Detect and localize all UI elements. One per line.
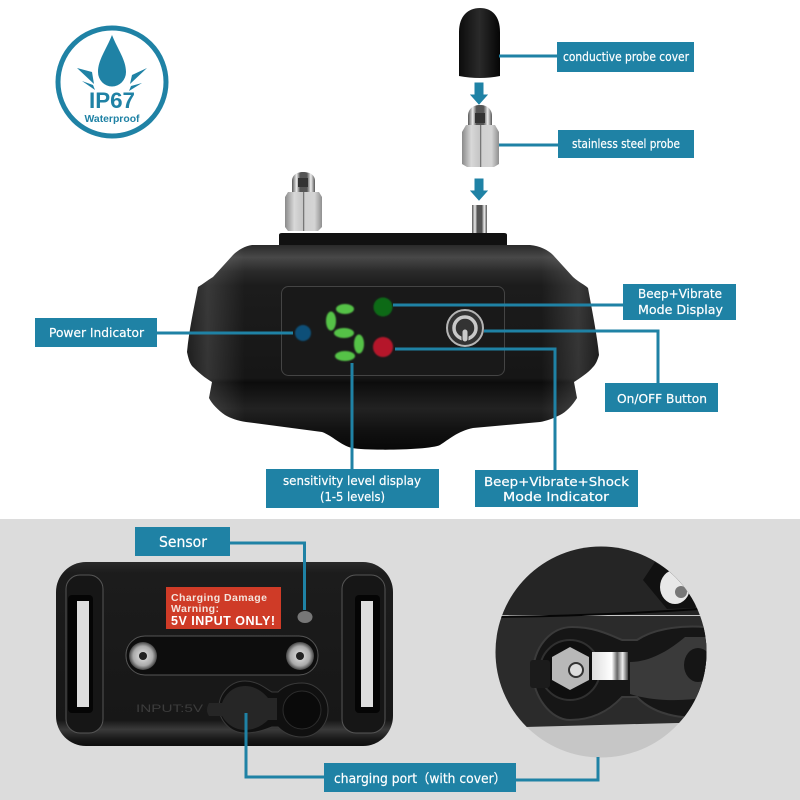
nut centre [569,663,583,677]
label: sensitivity level display: (1-5 levels) [320,490,385,504]
label: sensor [135,527,230,556]
leader line: shock indicator [395,349,555,470]
sensor window [298,611,312,623]
icon: IP67 waterproof badge: Waterproof [84,113,140,125]
power button [447,310,483,346]
leader line: sensor [230,543,304,610]
LED: sensitivity digit 5 [326,304,364,361]
leader line: probe [499,144,558,146]
warning sticker: 5V INPUT ONLY! [171,614,275,628]
housing [187,245,599,450]
label: sensor: Sensor [159,533,208,551]
leader line: cover [499,54,557,58]
icon: IP67 waterproof badge: IP67 [89,88,135,113]
label: on/off button [605,383,718,412]
label: stainless steel probe [558,130,694,158]
warning sticker [166,587,281,629]
mounting plate [279,233,507,246]
back housing [56,562,393,746]
white upper background [0,0,800,519]
grey lower panel [0,519,800,800]
leader line: charging port [246,713,324,777]
leader line: sensitivity [350,363,354,469]
left strap slot [66,575,103,733]
tab [530,660,550,688]
port opening ring [540,640,600,700]
electrode bar [126,636,318,675]
right strap slot [342,575,385,733]
seam line [490,608,715,617]
label: beep vibrate mode display [623,284,736,320]
label: charging port with cover: charging port（with cover） [334,772,506,787]
label: shock mode indicator: Mode Indicator [503,490,609,504]
port gasket outer [219,681,328,737]
icon: left mounted probe [285,172,322,231]
label: power indicator: Power Indicator [49,326,144,340]
rubber plug [630,637,706,700]
label: shock mode indicator [475,470,638,507]
leader line: power indicator [157,332,293,334]
arrow: cover to probe [471,83,487,104]
chrome contact [592,652,628,680]
label: conductive probe cover [557,42,694,72]
label: sensitivity level display: sensitivity level display [283,474,421,488]
warning sticker: Charging Damage [171,592,267,604]
collar front body [187,233,599,450]
leader line: beep vibrate [393,304,623,306]
upper right screw [643,562,700,609]
LED: power indicator [295,325,311,341]
LED: beep, vibrate and shock [373,337,393,357]
zoom background [502,615,700,758]
charging port cover [207,681,328,737]
port gasket [533,626,715,720]
upper shell [502,546,700,615]
label: on/off button: On/OFF Button [617,392,707,406]
label: stainless steel probe: stainless steel probe [572,137,680,151]
label: beep vibrate mode display: Mode Display [638,303,723,317]
arrow: probe to thread [471,179,487,200]
port lens [283,691,321,729]
icon: IP67 waterproof badge [58,28,166,136]
warning sticker: Warning: [171,603,219,615]
label: beep vibrate mode display: Beep+Vibrate [638,287,722,301]
label: shock mode indicator: Beep+Vibrate+Shock [484,475,629,489]
lower shell [490,616,715,727]
icon: threaded post [472,205,487,234]
LED: beep and vibrate [374,298,392,316]
hex nut [552,647,589,690]
label: power indicator [35,318,157,347]
zoomed charging port circle [496,546,706,758]
icon: conductive probe cover [459,8,500,78]
collar back view [56,562,393,746]
label: conductive probe cover: conductive probe cover [563,50,689,64]
label: sensitivity level display [266,469,439,508]
label: charging port with cover [324,763,516,792]
leader line: zoom circle [516,757,598,780]
housing side sheen [187,245,599,450]
display panel [282,286,504,376]
cover cap [207,686,277,730]
icon: stainless steel probe [462,105,499,167]
leader line: on/off button [484,331,658,383]
embossed input text: INPUT:5V [136,703,204,715]
